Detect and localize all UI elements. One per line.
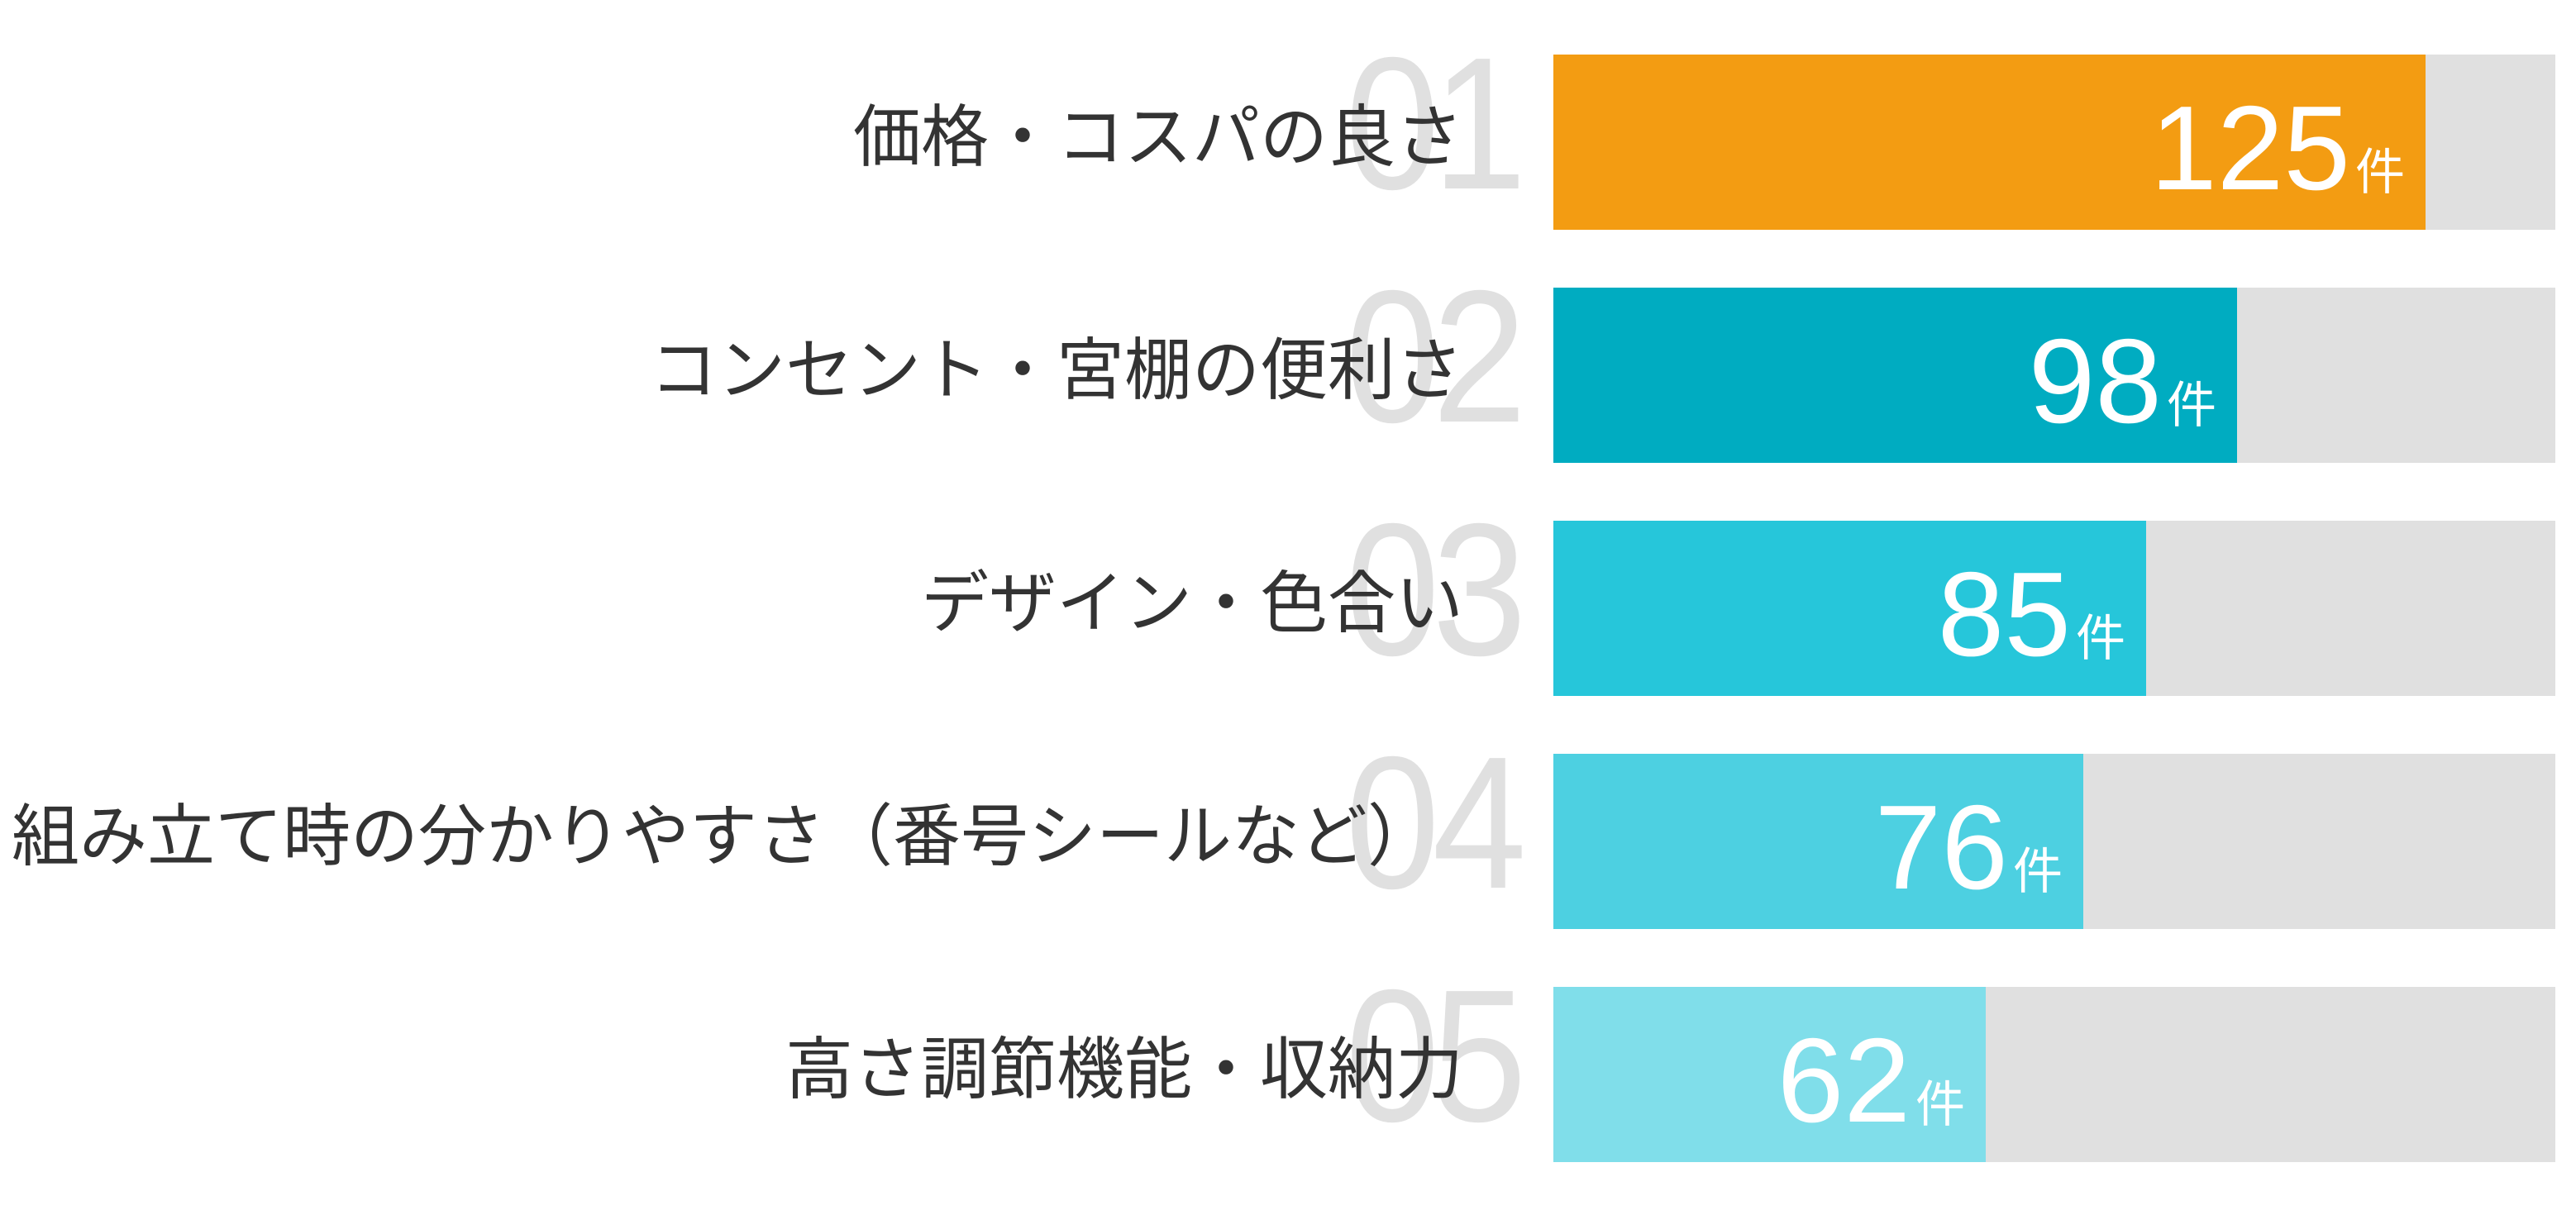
label 3: デザイン・色合い bbox=[921, 566, 1463, 641]
label 1: 価格・コスパの良さ bbox=[853, 100, 1463, 175]
rank number 02: 02 bbox=[1346, 252, 1519, 462]
bar 2 bbox=[1553, 288, 2555, 463]
bar 5: 62件 bbox=[1777, 1013, 1965, 1147]
rank number 03: 03 bbox=[1346, 485, 1519, 695]
rank number 04: 04 bbox=[1346, 718, 1519, 928]
bar 5 bbox=[1553, 987, 2555, 1162]
row 2 bbox=[650, 252, 2555, 463]
row 1 bbox=[853, 19, 2555, 230]
bar 4 bbox=[1553, 754, 2555, 929]
bar 1 bbox=[1553, 55, 2555, 230]
rank number 05: 05 bbox=[1346, 951, 1519, 1161]
row 5 bbox=[785, 951, 2555, 1162]
rank number 01: 01 bbox=[1346, 19, 1519, 229]
bar 2: 98件 bbox=[2029, 314, 2216, 448]
bar 4: 76件 bbox=[1875, 780, 2063, 914]
bar 3 bbox=[1553, 521, 2555, 696]
label 4: 組み立て時の分かりやすさ（番号シールなど） bbox=[12, 799, 1435, 874]
row 4 bbox=[12, 718, 2555, 929]
label 5: 高さ調節機能・収納力 bbox=[785, 1032, 1463, 1108]
label 2: コンセント・宮棚の便利さ bbox=[650, 333, 1463, 408]
bar 1: 125件 bbox=[2150, 81, 2405, 215]
bar 3: 85件 bbox=[1938, 547, 2125, 681]
row 3 bbox=[921, 485, 2555, 696]
